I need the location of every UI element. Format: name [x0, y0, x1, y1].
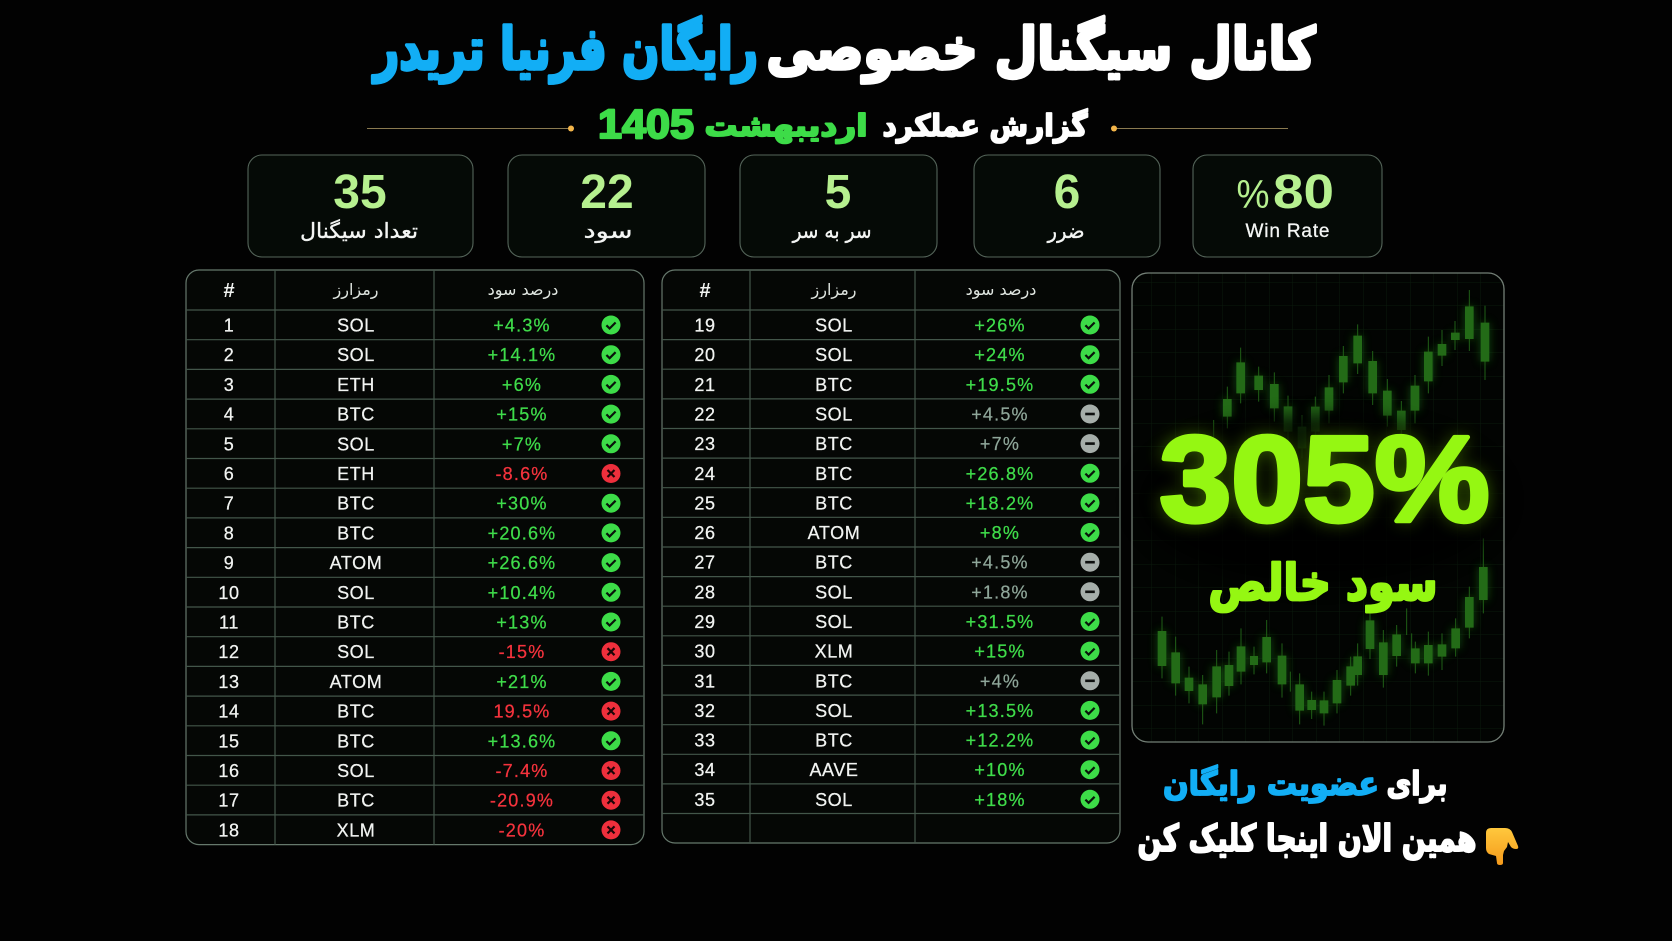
- row 12: 12: [218, 642, 240, 662]
- stat card: loss: 6: [1054, 166, 1080, 219]
- row 24: [694, 464, 1100, 484]
- stat card: total signals: [248, 155, 473, 257]
- row 8: +20.6%: [488, 523, 556, 543]
- row 17: BTC: [337, 791, 375, 811]
- subtitle with decorative lines: [367, 101, 1288, 147]
- row 34: +10%: [974, 760, 1026, 780]
- row 28: 28: [694, 582, 716, 602]
- icon: pointing-down hand: [1486, 828, 1518, 865]
- row 12: -15%: [499, 642, 545, 662]
- row 24: 24: [694, 464, 716, 484]
- stat card: profit: سود: [584, 219, 632, 243]
- row 20: SOL: [815, 345, 853, 365]
- row 3: [224, 375, 620, 395]
- row 20: [694, 345, 1100, 365]
- row 26: +8%: [980, 523, 1020, 543]
- row 1: 1: [224, 316, 234, 336]
- row 5: [224, 434, 620, 454]
- title: [372, 15, 1316, 84]
- row 4: +15%: [496, 405, 548, 425]
- row 13: +21%: [496, 672, 548, 692]
- row 26: 26: [694, 523, 716, 543]
- row 16: 16: [218, 761, 240, 781]
- table header: درصد سود: [488, 280, 558, 300]
- row 3: ETH: [337, 375, 375, 395]
- row 8: 8: [224, 523, 234, 543]
- stat card: win rate: %: [1236, 173, 1270, 217]
- row 6: ETH: [337, 464, 375, 484]
- stat card: profit: [508, 155, 705, 257]
- row 5: 5: [224, 434, 234, 454]
- row 2: +14.1%: [488, 345, 556, 365]
- row 4: [224, 405, 620, 425]
- row 35: +18%: [974, 790, 1026, 810]
- row 9: [224, 553, 620, 573]
- table: signals 1 to 18: [186, 270, 644, 845]
- table header: #: [699, 280, 711, 302]
- row 34: 34: [694, 760, 716, 780]
- table header: درصد سود: [966, 280, 1036, 300]
- row 23: BTC: [815, 434, 853, 454]
- row 35: [694, 790, 1100, 810]
- row 31: 31: [694, 671, 716, 691]
- row 9: +26.6%: [488, 553, 556, 573]
- row 27: [694, 553, 1100, 573]
- row 10: SOL: [337, 583, 375, 603]
- row 1: SOL: [337, 316, 375, 336]
- row 31: [694, 671, 1100, 691]
- table header: [223, 280, 558, 302]
- row 11: BTC: [337, 612, 375, 632]
- row 27: BTC: [815, 553, 853, 573]
- row 19: [694, 316, 1100, 336]
- row 33: [694, 731, 1100, 751]
- row 2: SOL: [337, 345, 375, 365]
- row 25: BTC: [815, 493, 853, 513]
- row 9: ATOM: [330, 553, 382, 573]
- row 6: [224, 464, 620, 484]
- row 13: ATOM: [330, 672, 382, 692]
- row 5: +7%: [502, 434, 542, 454]
- row 33: BTC: [815, 731, 853, 751]
- row 22: +4.5%: [971, 404, 1029, 424]
- title: کانال سیگنال خصوصی: [766, 15, 1316, 84]
- row 32: 32: [694, 701, 716, 721]
- dark halo behind the figure: [1135, 415, 1505, 585]
- row 25: 25: [694, 493, 716, 513]
- row 14: 19.5%: [493, 702, 551, 722]
- row 27: 27: [694, 553, 716, 573]
- row 1: +4.3%: [493, 316, 551, 336]
- subtitle with decorative lines: 1405: [598, 101, 694, 147]
- row 15: 15: [218, 731, 240, 751]
- row 30: XLM: [815, 642, 853, 662]
- row 10: [218, 583, 620, 603]
- row 26: ATOM: [808, 523, 860, 543]
- row 28: +1.8%: [971, 582, 1029, 602]
- row 3: 3: [224, 375, 234, 395]
- stat card: total signals: تعداد سیگنال: [300, 219, 418, 243]
- row 14: 14: [218, 702, 240, 722]
- row 14: BTC: [337, 702, 375, 722]
- row 21: BTC: [815, 375, 853, 395]
- subtitle with decorative lines: اردیبهشت: [704, 109, 868, 144]
- call to action: برای: [1386, 764, 1448, 804]
- table header: رمزارز: [810, 280, 857, 300]
- row 23: 23: [694, 434, 716, 454]
- row 3: +6%: [502, 375, 542, 395]
- row 19: 19: [694, 316, 716, 336]
- row 30: [694, 642, 1100, 662]
- row 1: [224, 316, 620, 336]
- row 31: BTC: [815, 671, 853, 691]
- row 35: 35: [694, 790, 716, 810]
- row 4: 4: [224, 405, 234, 425]
- big number 305%: 305%: [1160, 411, 1490, 547]
- row 11: [219, 612, 620, 632]
- row 15: +13.6%: [488, 731, 556, 751]
- row 29: +31.5%: [966, 612, 1034, 632]
- stat card: total signals: 35: [333, 166, 387, 219]
- row 13: [218, 672, 620, 692]
- row 31: +4%: [980, 671, 1020, 691]
- row 8: [224, 523, 620, 543]
- stat card: loss: ضرر: [1047, 219, 1084, 243]
- row 4: BTC: [337, 405, 375, 425]
- chart: background candlesticks: [1158, 290, 1489, 726]
- row 34: [694, 760, 1100, 780]
- table header: [699, 280, 1036, 302]
- table: signals 19 to 35: [662, 270, 1120, 843]
- stat card: break-even: 5: [825, 166, 851, 219]
- subtitle with decorative lines: گزارش عملکرد: [882, 108, 1088, 144]
- panel: net profit: [1132, 273, 1505, 742]
- row 19: +26%: [974, 316, 1026, 336]
- row 28: [694, 582, 1100, 602]
- row 29: 29: [694, 612, 716, 632]
- row 6: -8.6%: [495, 464, 549, 484]
- row 16: [218, 761, 620, 781]
- row 2: 2: [224, 345, 234, 365]
- row 23: +7%: [980, 434, 1020, 454]
- row 7: +30%: [496, 494, 548, 514]
- stat card: profit: 22: [580, 166, 634, 219]
- row 35: SOL: [815, 790, 853, 810]
- row 21: +19.5%: [966, 375, 1034, 395]
- row 26: [694, 523, 1100, 543]
- title: رایگان فرنیا تریدر: [372, 15, 758, 84]
- row 5: SOL: [337, 434, 375, 454]
- table header: #: [223, 280, 235, 302]
- row 30: +15%: [974, 642, 1026, 662]
- row 29: SOL: [815, 612, 853, 632]
- row 25: +18.2%: [966, 493, 1034, 513]
- row 18: 18: [218, 820, 240, 840]
- row 18: XLM: [337, 820, 375, 840]
- stat card: win rate: 80: [1273, 166, 1334, 219]
- call to action: [1138, 764, 1518, 865]
- stat card: break-even: سر به سر: [792, 219, 872, 243]
- row 22: SOL: [815, 404, 853, 424]
- net profit label: سود خالص: [1208, 554, 1438, 613]
- row 21: 21: [694, 375, 716, 395]
- row 14: [218, 702, 620, 722]
- row 24: +26.8%: [966, 464, 1034, 484]
- row 33: 33: [694, 731, 716, 751]
- row 33: +12.2%: [966, 731, 1034, 751]
- row 16: SOL: [337, 761, 375, 781]
- row 16: -7.4%: [495, 761, 549, 781]
- big number 305%: 305%: [1158, 411, 1490, 547]
- row 29: [694, 612, 1100, 632]
- row 32: [694, 701, 1100, 721]
- row 11: +13%: [496, 612, 548, 632]
- row 7: [224, 494, 620, 514]
- row 15: [218, 731, 620, 751]
- row 32: +13.5%: [966, 701, 1034, 721]
- row 25: [694, 493, 1100, 513]
- stat card: loss: [974, 155, 1160, 257]
- row 18: -20%: [499, 820, 545, 840]
- table header: رمزارز: [332, 280, 379, 300]
- row 6: 6: [224, 464, 234, 484]
- row 10: +10.4%: [488, 583, 556, 603]
- row 32: SOL: [815, 701, 853, 721]
- row 27: +4.5%: [971, 553, 1029, 573]
- stat card: win rate: [1193, 155, 1382, 257]
- row 17: -20.9%: [490, 791, 554, 811]
- row 7: BTC: [337, 494, 375, 514]
- row 19: SOL: [815, 316, 853, 336]
- row 20: 20: [694, 345, 716, 365]
- row 9: 9: [224, 553, 234, 573]
- call to action: عضویت رایگان: [1163, 764, 1379, 804]
- row 17: 17: [218, 791, 240, 811]
- row 28: SOL: [815, 582, 853, 602]
- row 17: [218, 791, 620, 811]
- row 7: 7: [224, 494, 234, 514]
- row 22: [694, 404, 1100, 424]
- row 22: 22: [694, 404, 716, 424]
- row 11: 11: [219, 612, 239, 632]
- row 8: BTC: [337, 523, 375, 543]
- row 18: [218, 820, 620, 840]
- row 24: BTC: [815, 464, 853, 484]
- stat card: win rate: Win Rate: [1246, 221, 1330, 242]
- row 13: 13: [218, 672, 240, 692]
- row 23: [694, 434, 1100, 454]
- row 15: BTC: [337, 731, 375, 751]
- row 34: AAVE: [809, 760, 859, 780]
- row 12: [218, 642, 620, 662]
- row 21: [694, 375, 1100, 395]
- row 10: 10: [218, 583, 240, 603]
- row 30: 30: [694, 642, 716, 662]
- stat card: break-even: [740, 155, 937, 257]
- call to action: همین الان اینجا کلیک کن: [1138, 817, 1476, 860]
- row 20: +24%: [974, 345, 1026, 365]
- row 2: [224, 345, 620, 365]
- row 12: SOL: [337, 642, 375, 662]
